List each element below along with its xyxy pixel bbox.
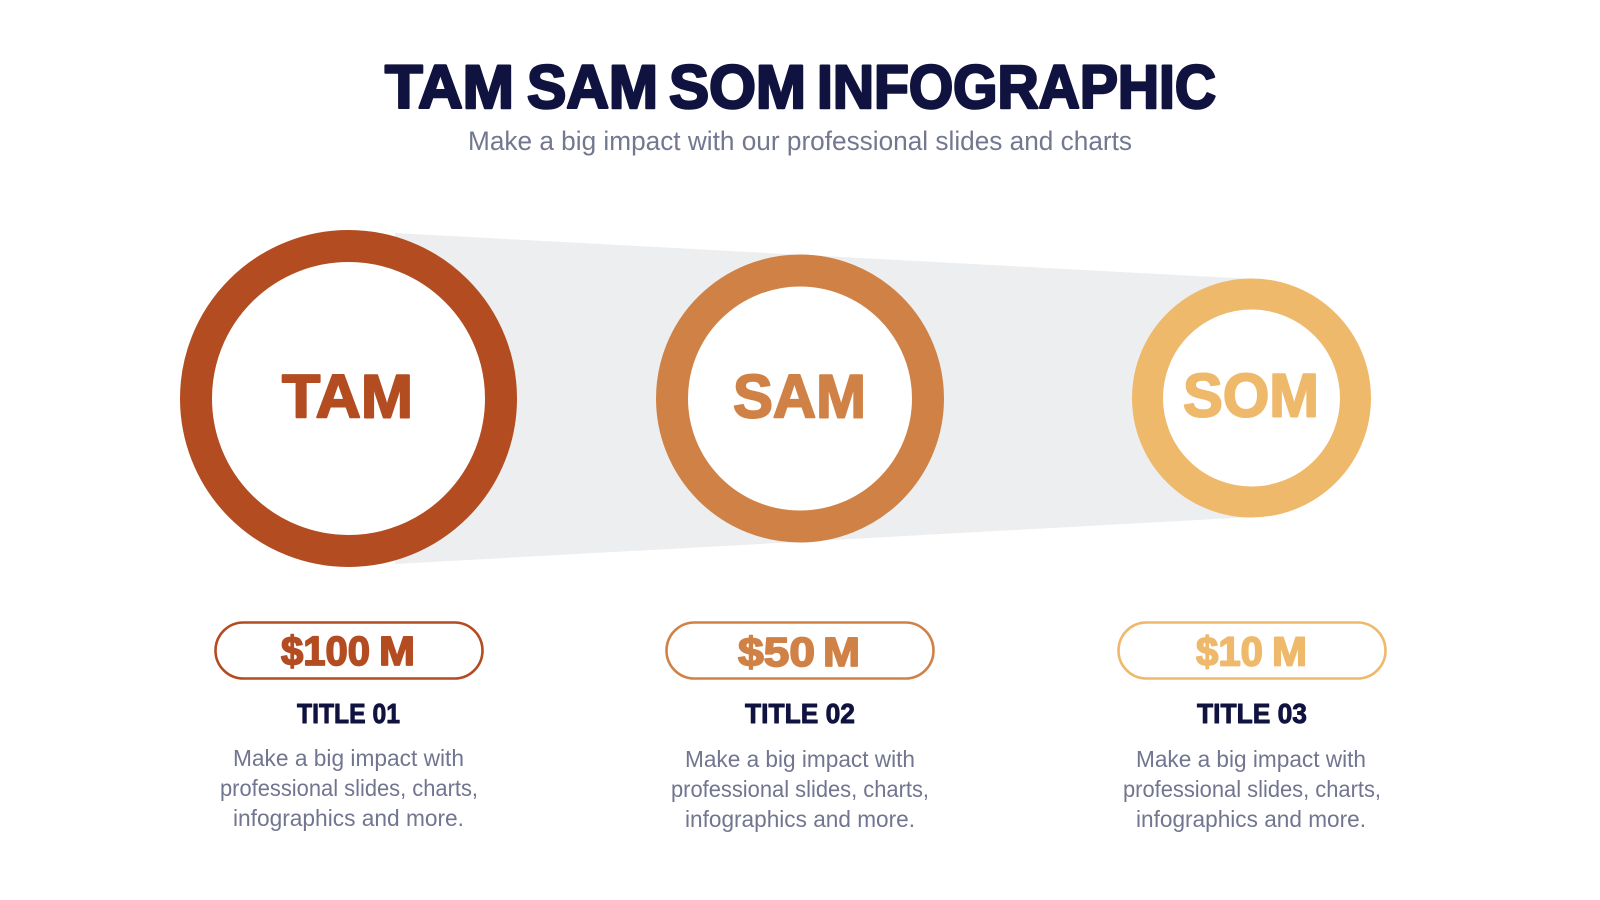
- subtitle: Make a big impact with our professional slides and charts: [468, 126, 1132, 156]
- title: SOM: [669, 53, 806, 121]
- title: [385, 53, 1216, 121]
- description 3: infographics and more.: [1136, 806, 1366, 832]
- heading: title 02: TITLE 02: [745, 698, 855, 729]
- value pill: $50 M: [666, 622, 934, 678]
- value pill: $50 M: M: [823, 629, 860, 675]
- value pill: $10 M: $10: [1196, 628, 1263, 674]
- column 1: TAM details: [216, 622, 482, 831]
- circle: TAM: [196, 246, 501, 551]
- value pill: $100 M: [216, 622, 482, 678]
- column 2: SAM details: [666, 622, 934, 832]
- description 1: professional slides, charts,: [220, 775, 478, 801]
- column 3: SOM details: [1118, 622, 1386, 832]
- circle: TAM: TAM: [282, 362, 413, 430]
- circle: SAM: SAM: [733, 362, 866, 430]
- title: INFOGRAPHIC: [817, 53, 1216, 121]
- circle: SOM: [1148, 294, 1356, 502]
- description 1: [220, 745, 478, 831]
- description 2: Make a big impact with: [685, 746, 915, 772]
- description 3: professional slides, charts,: [1123, 776, 1381, 802]
- value pill: $100 M: M: [379, 628, 415, 674]
- value pill: $50 M: $50: [738, 629, 815, 675]
- value pill: $10 M: [1118, 622, 1386, 678]
- heading: title 03: TITLE 03: [1197, 698, 1307, 729]
- description 1: Make a big impact with: [233, 745, 464, 771]
- description 2: infographics and more.: [685, 806, 915, 832]
- description 3: Make a big impact with: [1136, 746, 1366, 772]
- circle: SAM: [672, 270, 928, 526]
- title: TAM: [385, 53, 514, 121]
- description 2: professional slides, charts,: [671, 776, 929, 802]
- value pill: $100 M: $100: [281, 628, 370, 674]
- value pill: $10 M: M: [1272, 628, 1307, 674]
- description 2: [671, 746, 929, 832]
- title: SAM: [527, 53, 658, 121]
- heading: title 01: TITLE 01: [297, 698, 400, 729]
- description 3: [1123, 746, 1381, 832]
- circle: SOM: SOM: [1183, 362, 1319, 430]
- description 1: infographics and more.: [233, 805, 464, 831]
- funnel band connecting circles: [395, 233, 1252, 564]
